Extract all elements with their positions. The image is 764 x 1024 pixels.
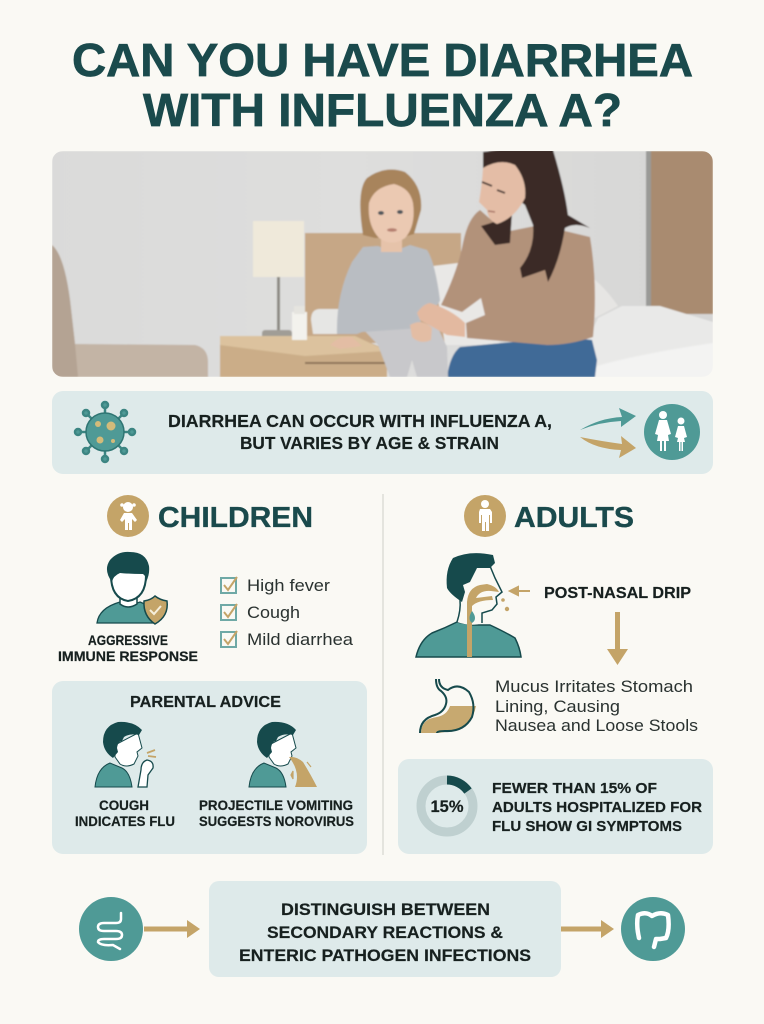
woman face (479, 162, 525, 224)
caption: cough (75, 798, 175, 829)
text: mucus explanation (495, 678, 698, 735)
heading: children: CHILDREN (158, 502, 313, 534)
stat text: FEWER THAN 15% OF (492, 780, 657, 797)
arrow: teal and gold split (580, 408, 636, 458)
arrow: down to stomach (607, 612, 628, 665)
woman hand (417, 303, 465, 337)
panel: conclusion (209, 881, 561, 977)
caption: cough: INDICATES FLU (75, 814, 175, 829)
woman sweater (441, 210, 595, 345)
text: mucus explanation: Lining, Causing (495, 698, 620, 716)
title (72, 34, 693, 136)
panel: conclusion: DISTINGUISH BETWEEN (281, 900, 490, 919)
child legs (366, 324, 450, 377)
banner: key message (52, 391, 713, 474)
checklist: symptoms: Mild diarrhea (247, 630, 354, 649)
child hands (330, 337, 362, 349)
icon: adult head with post-nasal drip (416, 553, 521, 657)
banner text (168, 411, 552, 453)
woman jeans (447, 337, 597, 377)
heading: adults (464, 495, 634, 537)
arrow: to nose (510, 587, 530, 595)
stat text: FLU SHOW GI SYMPTOMS (492, 818, 682, 835)
heading: adults: ADULTS (514, 502, 634, 534)
icon: stomach (420, 679, 476, 733)
caption: vomiting: PROJECTILE VOMITING (199, 798, 353, 813)
icon: child vomiting (249, 722, 317, 787)
arrow: message to colon (561, 920, 614, 938)
stat text: ADULTS HOSPITALIZED FOR (492, 799, 702, 816)
panel: 15% statistic (398, 759, 713, 854)
caption: aggressive immune response: AGGRESSIVE (88, 632, 168, 648)
icon: virus (75, 402, 135, 462)
stat text (492, 780, 702, 835)
woman hair (483, 150, 590, 282)
checklist: symptoms (221, 576, 354, 649)
caption: vomiting: SUGGESTS NOROVIRUS (199, 814, 354, 829)
panel: conclusion: ENTERIC PATHOGEN INFECTIONS (239, 946, 531, 965)
icon: child coughing (95, 722, 156, 787)
panel heading: PARENTAL ADVICE (130, 694, 281, 711)
icon: family in circle (644, 404, 700, 460)
arrow: intestine to message (144, 920, 200, 938)
label: post-nasal drip: POST-NASAL DRIP (544, 585, 691, 602)
headboard (305, 233, 461, 343)
title: CAN YOU HAVE DIARRHEA (72, 34, 693, 86)
donut chart: 15% (421, 780, 473, 832)
lamp (253, 221, 304, 277)
icon: small intestine (79, 897, 143, 961)
banner text: BUT VARIES BY AGE & STRAIN (240, 433, 499, 453)
armchair (74, 344, 208, 377)
caption: cough: COUGH (99, 798, 149, 813)
child body (337, 245, 440, 334)
icon: child with immune shield (97, 552, 167, 624)
caption: aggressive immune response (58, 632, 198, 664)
nightstand (219, 342, 388, 377)
child neck and head (380, 240, 402, 252)
photo: mother comforting a toddler on a bed (52, 150, 713, 377)
bottle and device (292, 312, 307, 340)
donut chart: 15%: 15% (430, 798, 464, 816)
caption: aggressive immune response: IMMUNE RESPONSE (58, 648, 198, 664)
pillows and bed (433, 263, 500, 345)
icon: large intestine (621, 897, 685, 961)
panel: parental advice (52, 681, 367, 854)
caption: vomiting (199, 798, 354, 829)
text: mucus explanation: Nausea and Loose Stools (495, 717, 698, 735)
banner text: DIARRHEA CAN OCCUR WITH INFLUENZA A, (168, 411, 552, 431)
checklist: symptoms: Cough (247, 603, 300, 622)
heading: children (107, 495, 313, 537)
divider (382, 494, 384, 855)
text: mucus explanation: Mucus Irritates Stomach (495, 678, 693, 696)
checklist: symptoms: High fever (247, 576, 330, 595)
title: WITH INFLUENZA A? (143, 84, 622, 136)
panel: conclusion: SECONDARY REACTIONS & (267, 923, 503, 942)
